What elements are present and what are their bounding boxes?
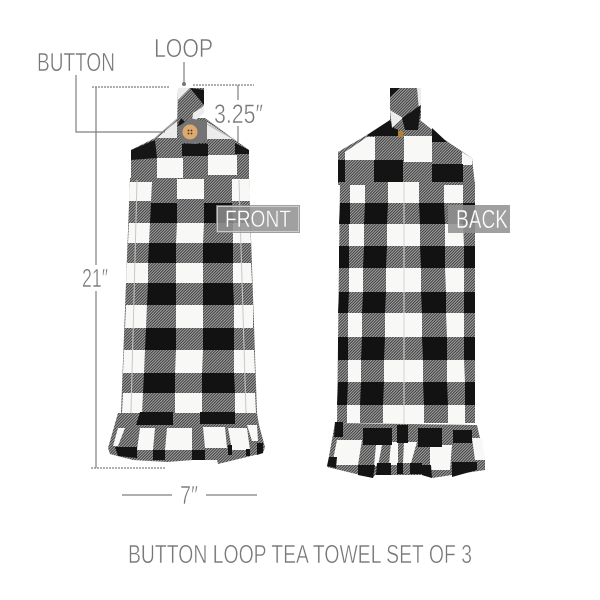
21 inch height line	[95, 87, 97, 468]
loop leader line	[183, 62, 185, 82]
3.25 inch measure ticks	[237, 85, 239, 142]
back towel: ruffle	[327, 422, 485, 478]
label: button: BUTTON	[37, 47, 115, 77]
loop marker dot	[182, 82, 186, 86]
tag: front: FRONT	[225, 206, 291, 233]
icon: wooden button	[182, 124, 198, 140]
label: 21 inches: 21″	[82, 263, 108, 293]
front towel: button tab	[177, 118, 207, 144]
7 inch width lines	[122, 494, 257, 496]
front towel	[108, 88, 265, 464]
label: loop: LOOP	[154, 33, 213, 63]
21 inch dotted extents	[91, 87, 170, 468]
tag: back	[448, 204, 510, 234]
front towel: ruffle	[108, 412, 265, 464]
3.25 inch dotted extents	[182, 85, 254, 143]
back towel	[327, 88, 485, 478]
back towel: shoulder	[338, 120, 475, 185]
back towel: button shank	[398, 131, 403, 137]
tag: back: BACK	[456, 204, 508, 234]
dimension lines	[76, 62, 257, 495]
front towel: hanging loop	[177, 88, 204, 127]
button leader line	[76, 75, 165, 132]
back towel: checked body	[337, 182, 475, 425]
front towel: checked body	[121, 178, 257, 413]
back towel: hanging loop	[390, 88, 421, 130]
label: 7 inches: 7″	[180, 480, 198, 510]
label: 3.25 inches: 3.25″	[214, 99, 263, 129]
caption: BUTTON LOOP TEA TOWEL SET OF 3	[128, 539, 472, 569]
front towel: shoulder	[131, 118, 249, 180]
